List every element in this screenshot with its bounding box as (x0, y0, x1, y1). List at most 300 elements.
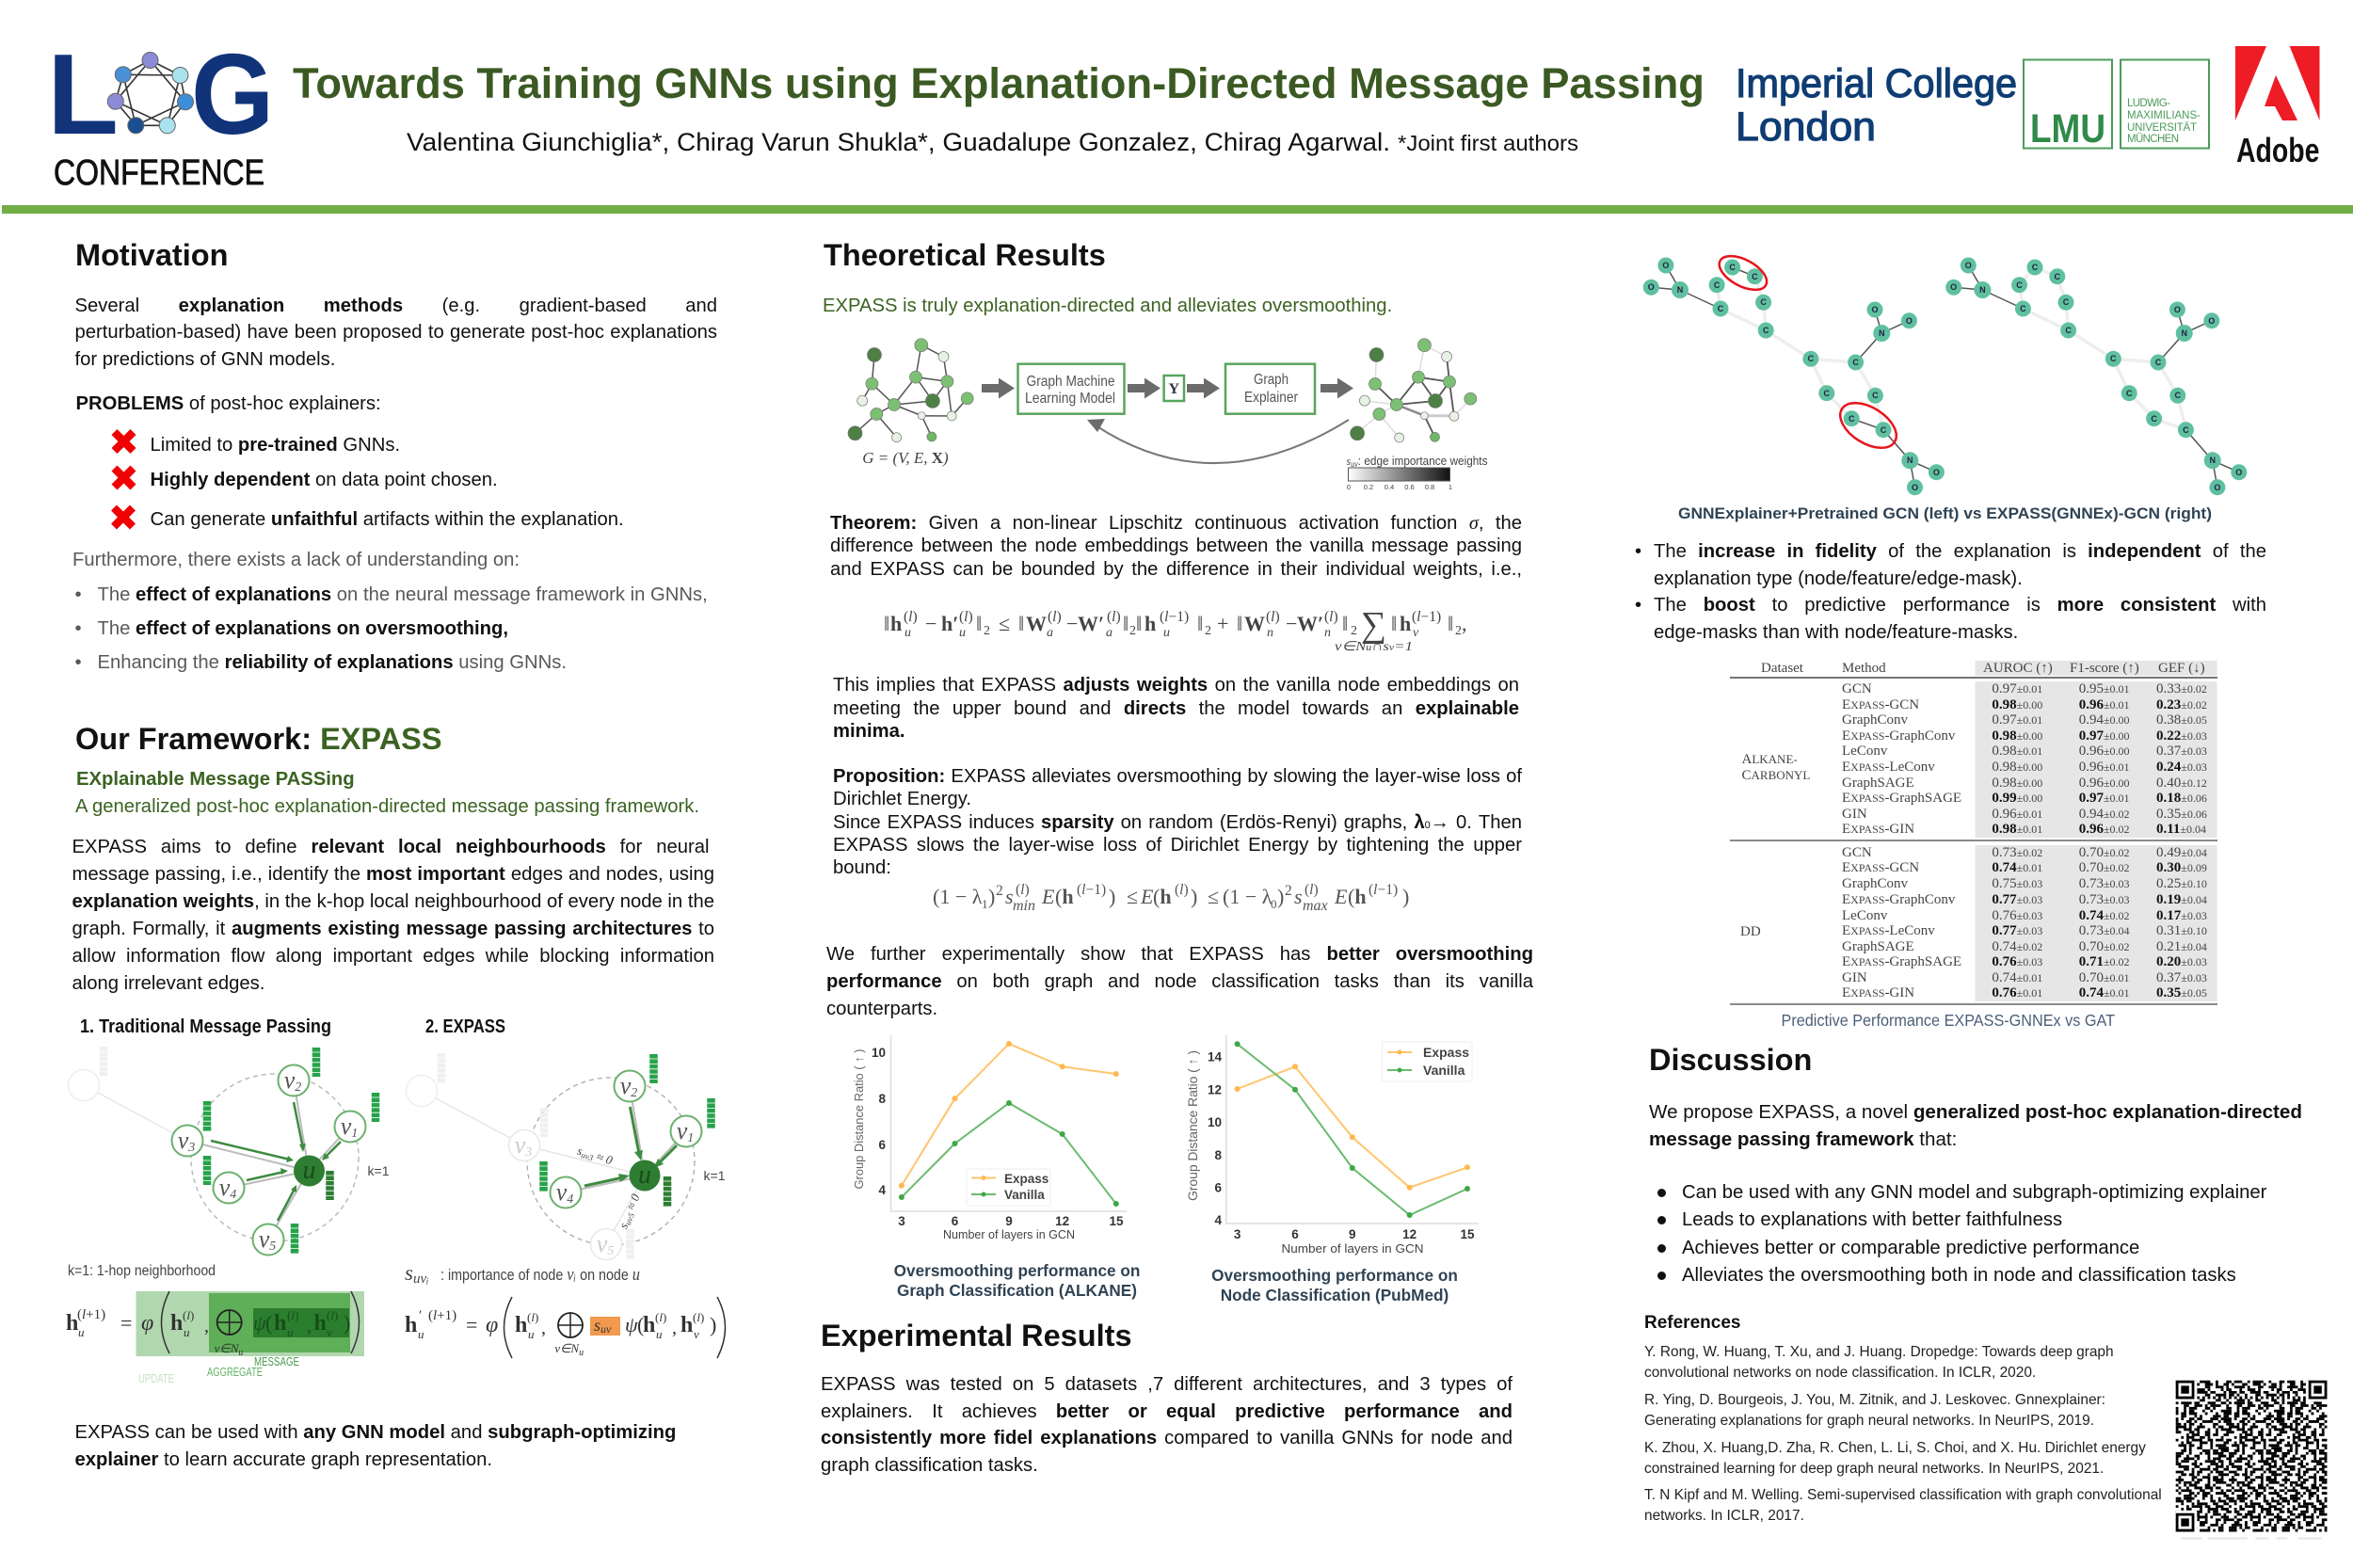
figure: traditional message passing: , (307, 1316, 312, 1336)
table: predictive performance: 0.17 (2156, 908, 2182, 923)
figure: EXPASS message passing: 1 (687, 1131, 694, 1145)
figure: EXPASS message passing: ′ (419, 1308, 422, 1323)
equation: Dirichlet bound: E (1041, 885, 1055, 908)
equation: theorem bound: ‖ (884, 612, 889, 635)
figure: traditional message passing: 3 (187, 1141, 195, 1155)
equation: theorem bound: h (1400, 612, 1411, 635)
block arrows (982, 378, 1353, 399)
line chart: alkane (852, 1035, 1140, 1300)
equation: theorem bound: (l) (1324, 609, 1338, 625)
box: graph explainer: Explainer (1244, 390, 1298, 406)
text: experimental results: EXPASS was tested on 5 datasets ,7 different architectures, and 3 types of (821, 1374, 1513, 1395)
equation: Dirichlet bound: ≤ (1208, 885, 1219, 908)
table: predictive performance: 0.35 (2156, 807, 2181, 822)
figure: EXPASS message passing: h (405, 1313, 417, 1337)
table: predictive performance: ±0.00 (2017, 760, 2042, 774)
table: predictive performance: ±0.04 (2104, 924, 2130, 937)
figure: EXPASS message passing: φ (486, 1313, 498, 1337)
table: predictive performance: ±0.02 (2104, 940, 2130, 953)
table: predictive performance: 0.73 (2079, 892, 2104, 907)
table: predictive performance: 0.19 (2156, 892, 2181, 907)
figure: traditional message passing: ) (344, 1311, 350, 1335)
table: predictive performance: 0.70 (2079, 845, 2104, 860)
molecule: EXPASS(GNNEx)-GCN: O (2214, 483, 2220, 492)
table: predictive performance: ±0.01 (2017, 861, 2042, 874)
equation: Dirichlet bound: (h (1348, 885, 1367, 908)
colour scale: edge importance: 1 (1449, 483, 1452, 491)
table: predictive performance: GraphSAGE (1842, 939, 1914, 954)
table: predictive performance: 0.96 (1992, 807, 2017, 822)
table: predictive performance: ±0.00 (2017, 792, 2042, 805)
equation: theorem bound: (l) (1048, 609, 1062, 625)
figure: traditional message passing: v∈N (215, 1341, 238, 1355)
text: motivation intro: Several explanation methods (e.g. gradient-based and (75, 296, 717, 316)
line chart: pubmed: Node Classification (PubMed) (1221, 1286, 1449, 1304)
header rule (2, 205, 2353, 214)
heading: Experimental Results: Experimental Results (821, 1319, 1132, 1352)
table: predictive performance: ±0.03 (2181, 729, 2207, 743)
equation: Dirichlet bound: s (1294, 885, 1303, 908)
list: conclusions: Leads to explanations with better faithfulness (1682, 1209, 2062, 1230)
table: predictive performance: ±0.03 (2181, 909, 2207, 922)
colour scale: edge importance: 0.4 (1385, 483, 1394, 491)
table: predictive performance: ±0.00 (2104, 729, 2130, 743)
figure: EXPASS message passing: uv (600, 1322, 612, 1336)
title: Towards Training GNNs using Explanation-Directed Message Passing (293, 59, 1705, 107)
equation: theorem bound: u (1163, 626, 1170, 640)
figure: traditional message passing: u (78, 1325, 85, 1339)
table: predictive performance: ±0.09 (2181, 861, 2207, 874)
table: predictive performance: ±0.03 (2181, 760, 2207, 774)
line chart: pubmed: 14 (1208, 1050, 1222, 1064)
colour scale: edge importance: 0.6 (1404, 483, 1415, 491)
line chart: pubmed: 10 (1208, 1115, 1222, 1129)
figure: traditional message passing: u (238, 1348, 243, 1358)
text: framework description: graph. Formally, it augments existing message passing architectures to (72, 919, 714, 939)
line chart: alkane: Group Distance Ratio ( ↑ ) (852, 1048, 866, 1190)
figure: traditional message passing: UPDATE (138, 1371, 174, 1385)
text: framework conclusion: EXPASS can be used with any GNN model and subgraph-optimizing (75, 1422, 676, 1443)
table: predictive performance: 0.95 (2079, 681, 2104, 696)
box: graph machine learning model: Learning Model (1025, 391, 1115, 407)
figure: traditional message passing: h (314, 1311, 327, 1336)
table: predictive performance: ±0.04 (2181, 846, 2207, 859)
table: predictive performance: GIN (1842, 807, 1867, 822)
equation: theorem bound: W (1026, 612, 1047, 635)
table: predictive performance: ±0.00 (2104, 776, 2130, 790)
equation: Dirichlet bound (933, 882, 1409, 914)
line chart: alkane: Oversmoothing performance on (894, 1261, 1140, 1280)
figure: EXPASS message passing: : importance of node vᵢ on node u (440, 1265, 640, 1285)
list: open issues: • Enhancing the reliability of explanations using GNNs. (75, 652, 567, 673)
list: fidelity findings: • (1635, 595, 1641, 616)
molecule: GNNExplainer + pretrained GCN: C (1714, 280, 1721, 290)
table: predictive performance: 0.96 (2079, 776, 2104, 791)
line chart: alkane: 6 (952, 1214, 959, 1228)
list: references (1644, 1344, 2162, 1524)
list: conclusions: Can be used with any GNN model and subgraph-optimizing explainer (1682, 1182, 2266, 1203)
equation: theorem bound: + (1217, 612, 1228, 635)
table: predictive performance: 0.74 (2079, 908, 2104, 923)
table: predictive performance: ±0.04 (2181, 940, 2207, 953)
table: predictive performance: GCN (1842, 845, 1872, 860)
table: predictive performance: ±0.12 (2181, 776, 2207, 790)
molecule: EXPASS(GNNEx)-GCN: C (2126, 389, 2133, 398)
molecule: GNNExplainer + pretrained GCN: C (1872, 391, 1879, 400)
figure: traditional message passing: v (341, 1112, 351, 1140)
list: problems (151, 435, 624, 530)
table: predictive performance: GCN (1842, 681, 1872, 696)
list: references: T. N Kipf and M. Welling. Semi-supervised classification with graph convolutional (1644, 1487, 2162, 1502)
figure: EXPASS message passing: (l) (527, 1310, 538, 1324)
table: predictive performance: ±0.04 (2180, 823, 2206, 836)
table: predictive performance: ±0.01 (2017, 682, 2042, 696)
line chart: alkane: 15 (1109, 1214, 1124, 1228)
equation: theorem bound: ‖ (976, 612, 982, 635)
figure: EXPASS message passing: ( (637, 1313, 644, 1336)
line chart: pubmed: Number of layers in GCN (1282, 1242, 1423, 1256)
list: references: Generating explanations for graph neural networks. In NeurIPS, 2019. (1644, 1413, 2094, 1429)
line chart: pubmed: 6 (1291, 1227, 1299, 1241)
figure: traditional message passing: (l) (183, 1308, 194, 1322)
text: implication: This implies that EXPASS adjusts weights on the vanilla node embeddings on (833, 675, 1519, 696)
table: predictive performance: ±0.03 (2017, 924, 2042, 937)
molecule: EXPASS(GNNEx)-GCN: C (2175, 391, 2182, 400)
line chart: pubmed (1185, 1035, 1479, 1304)
equation: theorem bound: W′ (1078, 612, 1104, 635)
text: experimental claim: We further experimentally show that EXPASS has better oversmoothing (826, 943, 1533, 964)
equation: theorem bound: ∑ (1361, 605, 1386, 645)
equation: theorem bound (884, 605, 1466, 654)
table: predictive performance: 0.70 (2079, 970, 2104, 985)
figure: EXPASS message passing: , (541, 1318, 546, 1338)
table: predictive performance: XPASS-GCN (1850, 697, 1919, 712)
equation: theorem bound: h (1144, 612, 1156, 635)
figure: EXPASS message passing: u (579, 1348, 584, 1358)
text: discussion intro (1649, 1101, 2302, 1150)
figure: EXPASS message passing: v (694, 1327, 699, 1341)
logo: Imperial College London: London (1736, 104, 1876, 150)
text: experimental results: explainers. It achieves better or equal predictive performance and (821, 1401, 1513, 1422)
molecule: GNNExplainer + pretrained GCN: C (1808, 354, 1815, 363)
line chart: alkane: Vanilla (1004, 1188, 1045, 1202)
table: predictive performance: ±0.04 (2181, 893, 2207, 906)
input graph (848, 339, 973, 467)
equation: theorem bound: ‖ (1136, 612, 1142, 635)
molecule: EXPASS(GNNEx)-GCN (1945, 258, 2247, 495)
figure: EXPASS message passing: s (405, 1261, 413, 1285)
logo: LMU: LUDWIG- (2127, 98, 2170, 109)
table: predictive performance: E (1842, 892, 1850, 907)
table: predictive performance: 0.76 (1992, 908, 2017, 923)
table: predictive performance: ±0.03 (2104, 877, 2130, 890)
text: proposition: Dirichlet Energy. (833, 789, 971, 809)
table: predictive performance: XPASS-LeConv (1850, 923, 1935, 938)
figure: EXPASS message passing: u (638, 1160, 651, 1190)
figure: EXPASS message passing: s (576, 1144, 584, 1159)
molecule: EXPASS(GNNEx)-GCN: C (2032, 263, 2039, 272)
line chart: pubmed: 8 (1214, 1148, 1222, 1162)
table: predictive performance: ±0.10 (2181, 877, 2207, 890)
figure: EXPASS message passing: , (672, 1318, 677, 1338)
table: predictive performance: ±0.00 (2017, 698, 2042, 712)
heading: Our Framework: Our Framework: EXPASS (75, 721, 442, 755)
table: predictive performance: ±0.01 (2104, 698, 2130, 712)
table: predictive performance: E (1842, 860, 1850, 875)
molecule: EXPASS(GNNEx)-GCN: C (2020, 304, 2026, 313)
molecule: GNNExplainer + pretrained GCN: C (1763, 326, 1769, 335)
table: predictive performance: 0.25 (2156, 876, 2181, 891)
text: problems intro: PROBLEMS of post-hoc explainers: (75, 393, 381, 414)
molecule: GNNExplainer + pretrained GCN: N (1879, 328, 1885, 338)
figure: EXPASS message passing: v (597, 1230, 607, 1257)
equation: theorem bound: v (1413, 626, 1419, 640)
table: predictive performance: 0.96 (2079, 697, 2104, 712)
list: problems: Can generate unfaithful artifacts within the explanation. (151, 509, 624, 530)
table: predictive performance: DD (1740, 924, 1761, 939)
table: predictive performance: XPASS-GIN (1850, 985, 1914, 1000)
table: predictive performance: 0.37 (2156, 970, 2182, 985)
line chart: pubmed: 12 (1402, 1227, 1417, 1241)
list: references: Y. Rong, W. Huang, T. Xu, and J. Huang. Dropedge: Towards deep graph (1644, 1344, 2114, 1359)
table: predictive performance: 0.96 (2079, 744, 2104, 759)
text: framework description: explanation weights, in the k-hop local neighbourhood of every node in the (72, 891, 714, 912)
equation: theorem bound: a (1047, 626, 1053, 640)
table: predictive performance (1730, 661, 2217, 1004)
table: predictive performance: ±0.02 (2104, 861, 2130, 874)
text: implication: minima. (833, 721, 905, 742)
text: discussion intro: We propose EXPASS, a novel generalized post-hoc explanation-directed (1649, 1101, 2302, 1123)
heading: Motivation: Motivation (75, 238, 228, 272)
molecule: EXPASS(GNNEx)-GCN: O (2235, 468, 2242, 477)
figure: traditional message passing: u (303, 1156, 316, 1185)
equation: Dirichlet bound: s (1005, 885, 1014, 908)
figure: traditional message passing: k=1: 1-hop neighborhood (68, 1263, 216, 1279)
figure: EXPASS message passing: ) (710, 1313, 716, 1336)
figure: traditional message passing: φ (141, 1311, 153, 1336)
equation: theorem bound: 2 (1205, 624, 1211, 638)
figure: traditional message passing: 1. Traditional Message Passing (80, 1016, 331, 1037)
figure: EXPASS message passing: h (515, 1313, 527, 1337)
molecule: EXPASS(GNNEx)-GCN: C (2151, 414, 2157, 424)
table: predictive performance: 0.77 (1992, 892, 2017, 907)
line chart: alkane: Graph Classification (ALKANE) (897, 1281, 1137, 1300)
line chart: alkane: 3 (898, 1214, 905, 1228)
table: predictive performance: XPASS-LeConv (1850, 760, 1935, 775)
text: experimental results (821, 1374, 1513, 1476)
list: fidelity findings: edge-masks than with node/feature-masks. (1654, 622, 2018, 643)
table caption: Predictive Performance EXPASS-GNNEx vs GAT (1781, 1011, 2115, 1030)
equation: theorem bound: − (925, 612, 936, 635)
table: predictive performance: 0.74 (1992, 970, 2017, 985)
table: predictive performance: ±0.02 (2104, 846, 2130, 859)
table: predictive performance: 0.22 (2156, 728, 2181, 744)
list: fidelity findings: explanation type (node/feature/edge-mask). (1654, 568, 2023, 589)
molecule: EXPASS(GNNEx)-GCN: N (1979, 285, 1986, 295)
logo: Adobe (2235, 46, 2319, 169)
text: experimental results: graph classification tasks. (821, 1455, 1038, 1476)
equation: Dirichlet bound: ) (1191, 885, 1197, 908)
table: predictive performance: ±0.02 (2181, 698, 2207, 712)
text: framework description (72, 837, 714, 994)
text: experimental results: consistently more fidel explanations compared to vanilla GNNs for node and (821, 1428, 1513, 1448)
equation: Dirichlet bound: ) (988, 885, 995, 908)
figure: EXPASS message passing: 2. EXPASS (425, 1016, 505, 1037)
authors: Valentina Giunchiglia*, Chirag Varun Shukla*, Guadalupe Gonzalez, Chirag Agarwal. (407, 128, 1390, 156)
text: theorem: and EXPASS can be bounded by the difference in their individual weights, i.e., (830, 559, 1522, 580)
table: predictive performance: ±0.01 (2017, 713, 2042, 727)
table: predictive performance: ±0.00 (2104, 744, 2130, 758)
text: framework description: along irrelevant edges. (72, 973, 264, 994)
list: open issues (75, 584, 708, 673)
table: predictive performance: E (1842, 697, 1850, 712)
text: experimental claim (826, 943, 1533, 1018)
text: framework description: message passing, i.e., identify the most important edges and nodes, using (72, 864, 714, 885)
text: motivation intro (75, 296, 717, 370)
equation: Dirichlet bound: ) (1277, 885, 1284, 908)
equation: Dirichlet bound: ) (1109, 885, 1115, 908)
logo: LoG conference: CONFERENCE (54, 153, 264, 193)
table: predictive performance: 0.98 (1992, 776, 2017, 791)
table: predictive performance: 0.98 (1992, 822, 2017, 837)
table: predictive performance: 0.73 (1992, 845, 2017, 860)
figure: traditional message passing: u (287, 1325, 294, 1339)
table: predictive performance: GraphSAGE (1842, 776, 1914, 791)
table: predictive performance: ±0.06 (2181, 808, 2207, 821)
table: predictive performance: 0.98 (1992, 697, 2017, 712)
figure: traditional message passing: (l) (327, 1308, 338, 1322)
logo: Imperial College London (1736, 61, 2017, 150)
equation: theorem bound: (l) (1266, 609, 1280, 625)
list: references: networks. In ICLR, 2017. (1644, 1508, 1804, 1524)
text: proposition: Proposition: EXPASS alleviates oversmoothing by slowing the layer-wise loss of (833, 766, 1522, 787)
table: predictive performance: XPASS-GraphSAGE (1850, 791, 1961, 806)
figure: traditional message passing: (l) (287, 1308, 298, 1322)
figure: traditional message passing: v (327, 1325, 332, 1339)
figure: traditional message passing: h (170, 1311, 183, 1336)
table: predictive performance: XPASS-GraphConv (1850, 728, 1955, 744)
figure: EXPASS message passing: h (680, 1313, 693, 1337)
list: references: R. Ying, D. Bourgeois, J. You, M. Zitnik, and J. Leskovec. Gnnexplainer: (1644, 1391, 2105, 1408)
text: motivation intro: for predictions of GNN models. (75, 349, 335, 370)
table: predictive performance: ARBONYL (1752, 768, 1810, 782)
equation: Dirichlet bound: min (1013, 898, 1035, 914)
molecule: EXPASS(GNNEx)-GCN: N (2181, 328, 2187, 338)
table: predictive performance: 0.76 (1992, 985, 2017, 1000)
logo: LMU: MAXIMILIANS- (2127, 110, 2201, 121)
equation: Dirichlet bound: (h (1153, 885, 1172, 908)
equation: theorem bound: 2 (1455, 624, 1462, 638)
figure: EXPASS message passing: h (643, 1313, 655, 1337)
molecule: EXPASS(GNNEx)-GCN: O (1950, 282, 1957, 292)
equation: theorem bound: ‖ (1342, 612, 1348, 635)
figure: EXPASS message passing: ≈ 0 (622, 1192, 643, 1215)
figure: traditional message passing: AGGREGATE (207, 1365, 263, 1379)
subheading: EXPASS definition: A generalized post-hoc explanation-directed message passing framework. (75, 796, 699, 817)
table: predictive performance: 0.74 (1992, 860, 2017, 875)
line chart: alkane: Expass (1004, 1172, 1048, 1186)
equation: theorem bound: (l) (959, 609, 973, 625)
molecule: EXPASS(GNNEx)-GCN: C (2063, 297, 2070, 307)
equation: theorem bound: n (1324, 626, 1331, 640)
logo: LoG conference (47, 29, 274, 193)
figure: traditional message passing: 2 (295, 1080, 301, 1095)
molecule: EXPASS(GNNEx)-GCN: C (2065, 326, 2072, 335)
line chart: pubmed: 6 (1214, 1180, 1222, 1195)
table: predictive performance: E (1842, 791, 1850, 806)
logo: LoG conference: L (47, 30, 119, 159)
table: predictive performance: GraphConv (1842, 712, 1908, 728)
table: predictive performance: XPASS-GIN (1850, 822, 1914, 837)
table: predictive performance: ±0.03 (2181, 971, 2207, 984)
line chart: pubmed: 12 (1208, 1082, 1222, 1097)
equation: theorem bound: 2 (1129, 624, 1136, 638)
equation: Dirichlet bound: (l) (1305, 882, 1319, 898)
text: motivation intro: perturbation-based) have been proposed to generate post-hoc explanations (75, 322, 717, 343)
table: predictive performance: ±0.03 (2017, 893, 2042, 906)
molecule: EXPASS(GNNEx)-GCN: C (2183, 425, 2189, 435)
table: predictive performance: 0.24 (2156, 760, 2182, 775)
table: predictive performance: ±0.00 (2017, 776, 2042, 790)
box: graph explainer (1225, 364, 1315, 414)
logo: LoG conference: G (191, 29, 274, 158)
line chart: pubmed: 3 (1234, 1227, 1241, 1241)
text: framework conclusion (75, 1422, 676, 1470)
table: predictive performance: GIN (1842, 970, 1867, 985)
table: predictive performance: XPASS-GraphSAGE (1850, 954, 1961, 969)
problem icons: red crosses (111, 429, 136, 529)
equation: theorem bound: ≤ (999, 612, 1010, 635)
table: predictive performance: ±0.03 (2181, 744, 2207, 758)
table: predictive performance: ±0.01 (2017, 971, 2042, 984)
table: predictive performance: ±0.02 (2017, 846, 2042, 859)
equation: theorem bound: ‖ (1018, 612, 1024, 635)
table: predictive performance: 0.98 (1992, 760, 2017, 775)
colour scale: edge importance: 0.8 (1425, 483, 1434, 491)
text: theorem: difference between the node embeddings between the vanilla message passing (830, 536, 1522, 556)
molecule: GNNExplainer + pretrained GCN: C (1752, 272, 1758, 281)
line chart: alkane: 9 (1005, 1214, 1013, 1228)
figure: traditional message passing: ( (265, 1311, 272, 1335)
line chart: pubmed: 4 (1214, 1213, 1222, 1227)
table: predictive performance: ±0.03 (2017, 955, 2042, 968)
table: predictive performance: 0.98 (1992, 744, 2017, 759)
box: Y output (1164, 376, 1184, 401)
equation: theorem bound: W (1244, 612, 1265, 635)
table: predictive performance: 0.20 (2156, 954, 2181, 969)
table: predictive performance: 0.94 (2079, 712, 2104, 728)
table: predictive performance: ±0.01 (2104, 792, 2130, 805)
table: predictive performance: ±0.02 (2104, 909, 2130, 922)
equation: theorem bound: h (890, 612, 902, 635)
text: framework description: EXPASS aims to define relevant local neighbourhoods for neural (72, 837, 710, 857)
callout: red ellipses (1714, 249, 1904, 457)
equation: theorem bound: 2 (984, 624, 990, 638)
figure: EXPASS message passing (405, 1016, 726, 1358)
equation: theorem bound: a (1106, 626, 1112, 640)
equation: theorem bound: − (1286, 612, 1297, 635)
line chart: alkane: 6 (878, 1138, 886, 1152)
heading: Theoretical Results: Theoretical Results (824, 238, 1106, 272)
table: predictive performance: 0.21 (2156, 939, 2181, 954)
molecule: EXPASS(GNNEx)-GCN: O (2208, 316, 2215, 326)
figure: EXPASS message passing: v (677, 1117, 687, 1144)
molecule: GNNExplainer + pretrained GCN: C (1881, 425, 1887, 435)
molecule: EXPASS(GNNEx)-GCN: O (1965, 261, 1972, 270)
equation: theorem bound: ‖ (1123, 612, 1128, 635)
equation: theorem bound: n (1267, 626, 1273, 640)
table: predictive performance: ±0.01 (2104, 986, 2130, 1000)
